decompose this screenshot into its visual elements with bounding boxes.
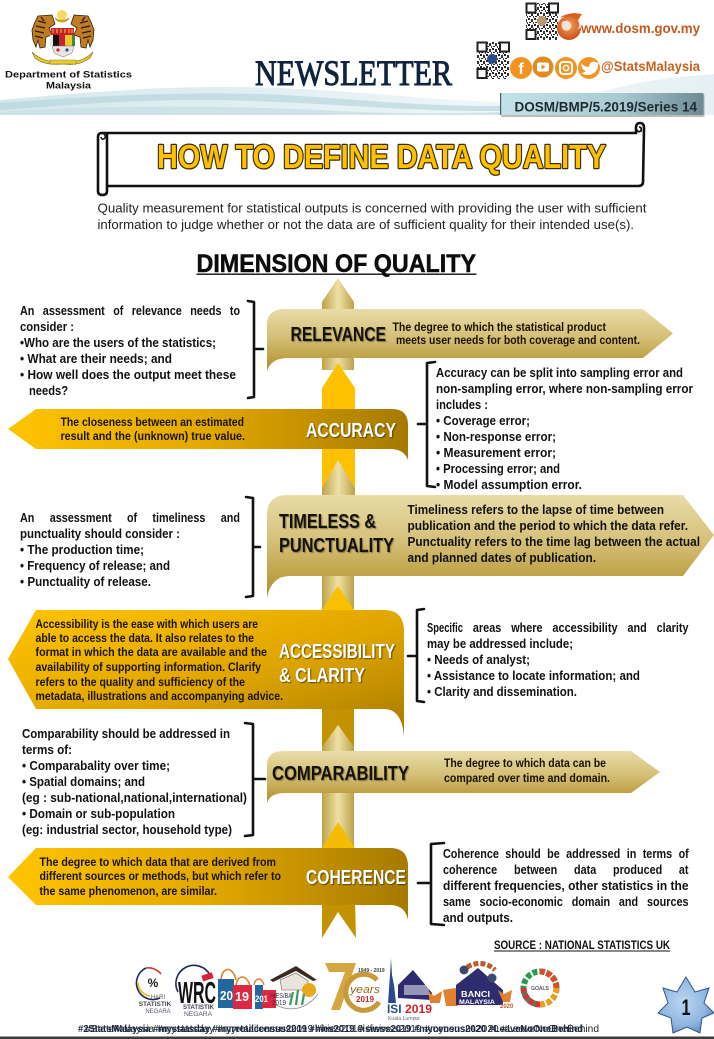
accuracy bracket bbox=[418, 362, 435, 487]
logo: WRC bbox=[176, 965, 216, 1018]
logo: Hari Statistik Negara: NEGARA bbox=[145, 1009, 171, 1015]
logo: retail census shopping bags bbox=[218, 970, 276, 1009]
social QR code bbox=[477, 42, 509, 79]
logo: WRC: STATISTIK bbox=[183, 1004, 214, 1011]
coherence definition: the same phenomenon, are similar. bbox=[40, 884, 217, 898]
timeliness definition: Timeliness refers to the lapse of time between bbox=[408, 502, 664, 517]
panel: comparability bbox=[22, 723, 660, 837]
timeliness considerations: • The production time; bbox=[20, 542, 144, 557]
logo: SDG wheel bbox=[524, 972, 556, 1004]
logo: household survey: HIES/BA bbox=[270, 993, 292, 1000]
logo: 70 years: years bbox=[349, 984, 381, 996]
coherence details: in bbox=[627, 846, 636, 861]
accessibility definition: metadata, illustrations and accompanying advice. bbox=[36, 689, 283, 703]
coherence details: and bbox=[619, 894, 638, 909]
accuracy details: • Processing error; and bbox=[436, 461, 560, 476]
comparability definition bbox=[444, 756, 610, 785]
accessibility details: • Assistance to locate information; and bbox=[427, 668, 640, 683]
accessibility bracket bbox=[408, 609, 424, 702]
intro paragraph bbox=[98, 200, 647, 232]
coherence details bbox=[443, 846, 689, 925]
coherence details: domain bbox=[572, 894, 610, 909]
relevance considerations: to bbox=[230, 303, 240, 318]
logo: ISI 2019 Kuala Lumpur: Kuala Lumpur bbox=[388, 1016, 420, 1022]
accuracy details: Accuracy can be split into sampling error and bbox=[436, 365, 683, 380]
comparability considerations: (eg : sub-national,national,international) bbox=[22, 790, 247, 805]
logo: ISI 2019 Kuala Lumpur bbox=[387, 958, 442, 1022]
accessibility details: • Clarity and dissemination. bbox=[427, 684, 577, 699]
accuracy details: • Measurement error; bbox=[436, 445, 556, 460]
accessibility definition: Accessibility is the ease with which users are bbox=[36, 617, 258, 631]
coherence definition: different sources or methods, but which refer to bbox=[40, 869, 281, 883]
panel: accuracy bbox=[8, 362, 693, 492]
logo: Hari Statistik Negara: HARI bbox=[151, 995, 165, 1001]
icon: social media buttons bbox=[510, 56, 600, 79]
relevance considerations: consider : bbox=[20, 319, 74, 334]
accessibility details: where bbox=[510, 620, 542, 635]
central arrow column bbox=[322, 278, 356, 938]
coherence details: produced bbox=[613, 862, 662, 877]
coherence details: Coherence bbox=[443, 846, 499, 861]
icon: social media buttons: f bbox=[518, 61, 524, 78]
accessibility details: accessibility bbox=[552, 620, 618, 635]
timeliness considerations: assessment bbox=[50, 510, 112, 525]
main title: HOW TO DEFINE DATA QUALITY bbox=[157, 138, 606, 175]
logo: ISI 2019 Kuala Lumpur: 2019 bbox=[405, 1002, 432, 1016]
accessibility details: and bbox=[628, 620, 647, 635]
icon: coat of arms bbox=[32, 10, 94, 64]
comparability considerations: • Spatial domains; and bbox=[22, 774, 145, 789]
relevance bracket bbox=[248, 301, 263, 398]
logo: Banci Malaysia 2020: BANCI bbox=[461, 989, 490, 999]
logo: Hari Statistik Negara: STATISTIK bbox=[139, 1001, 172, 1008]
relevance considerations: An bbox=[20, 303, 34, 318]
relevance considerations: relevance bbox=[132, 303, 182, 318]
relevance considerations: of bbox=[113, 303, 124, 318]
coherence bracket bbox=[418, 843, 444, 925]
series tab bbox=[500, 93, 704, 117]
comparability considerations: terms of: bbox=[22, 742, 72, 757]
relevance considerations: • How well does the output meet these bbox=[20, 367, 236, 382]
panel: coherence bbox=[8, 843, 689, 925]
coherence details: and outputs. bbox=[443, 910, 513, 925]
intro paragraph: information to judge whether or not the data are of sufficient quality for their intended use(s). bbox=[98, 217, 634, 232]
coherence details: same bbox=[443, 894, 471, 909]
timeliness banner bbox=[267, 495, 714, 598]
logo: ISI 2019 Kuala Lumpur: ISI bbox=[387, 1002, 402, 1016]
comparability label: COMPARABILITY bbox=[272, 763, 410, 785]
intro paragraph: Quality measurement for statistical outputs is concerned with providing the user with sufficient bbox=[98, 200, 647, 216]
website QR code bbox=[526, 3, 558, 40]
relevance banner bbox=[267, 309, 673, 371]
accuracy definition: The closeness between an estimated bbox=[60, 415, 244, 429]
timeliness considerations: An bbox=[20, 510, 34, 525]
coherence details: addressed bbox=[566, 846, 620, 861]
accessibility banner bbox=[8, 610, 404, 737]
coherence details: be bbox=[547, 846, 560, 861]
coherence details: terms bbox=[643, 846, 672, 861]
hashtags: #StatsMalaysia #mystatsday #myretailcensus2019 #hies2019 #isiwss2019 #mycensus2020 #LeaveNoOneBehind bbox=[85, 1024, 599, 1035]
relevance considerations: needs? bbox=[29, 383, 68, 398]
timeliness considerations: and bbox=[221, 510, 240, 525]
accessibility details: Specific bbox=[427, 620, 463, 635]
accessibility details: areas bbox=[473, 620, 501, 635]
timeliness label: PUNCTUALITY bbox=[279, 535, 395, 557]
series tab: DOSM/BMP/5.2019/Series 14 bbox=[514, 98, 697, 114]
comparability definition: The degree to which data can be bbox=[444, 756, 606, 770]
coherence details: at bbox=[679, 862, 689, 877]
relevance considerations bbox=[20, 303, 240, 398]
accessibility definition: able to access the data. It also relates to the bbox=[36, 631, 254, 645]
coherence details: socio-economic bbox=[480, 894, 563, 909]
icon: globe bbox=[557, 13, 583, 40]
accuracy definition bbox=[60, 415, 245, 443]
accuracy details: • Non-response error; bbox=[436, 429, 556, 444]
source note: SOURCE : NATIONAL STATISTICS UK bbox=[494, 938, 670, 952]
timeliness bracket bbox=[246, 497, 260, 597]
timeliness considerations bbox=[20, 510, 240, 589]
accessibility details: • Needs of analyst; bbox=[427, 652, 530, 667]
timeliness label: TIMELESS & bbox=[279, 511, 376, 533]
relevance considerations: needs bbox=[190, 303, 222, 318]
logo: retail census shopping bags: 201 bbox=[255, 994, 268, 1004]
timeliness considerations: timeliness bbox=[152, 510, 205, 525]
coherence details: sources bbox=[647, 894, 688, 909]
coherence banner bbox=[8, 848, 408, 920]
accuracy details: • Coverage error; bbox=[436, 413, 530, 428]
accessibility details: may be addressed include; bbox=[427, 636, 573, 651]
accessibility details bbox=[427, 620, 689, 699]
comparability considerations: (eg: industrial sector, household type) bbox=[22, 822, 232, 837]
accuracy details: • Model assumption error. bbox=[436, 477, 582, 492]
logo: 70 years: 1949 - 2019 bbox=[358, 968, 385, 974]
organisation name: Malaysia bbox=[46, 80, 92, 92]
coherence label: COHERENCE bbox=[306, 867, 406, 889]
comparability considerations bbox=[22, 726, 247, 837]
logo: WRC: NEGARA bbox=[184, 1012, 212, 1018]
panel: timeliness and punctuality bbox=[20, 495, 714, 598]
relevance definition: The degree to which the statistical product bbox=[392, 320, 606, 334]
timeliness definition bbox=[408, 502, 700, 565]
relevance definition: meets user needs for both coverage and content. bbox=[396, 333, 640, 347]
organisation name: Department of Statistics bbox=[5, 70, 132, 80]
page number star: 1 bbox=[682, 995, 690, 1020]
logo: retail census shopping bags: 19 bbox=[235, 989, 249, 1004]
logo: Banci Malaysia 2020: 2020 bbox=[500, 1004, 514, 1010]
timeliness considerations: • Punctuality of release. bbox=[20, 574, 151, 589]
comparability banner bbox=[267, 751, 660, 803]
timeliness definition: publication and the period to which the data refer. bbox=[408, 518, 688, 533]
accessibility definition bbox=[36, 617, 283, 703]
comparability considerations: • Domain or sub-population bbox=[22, 806, 175, 821]
comparability definition: compared over time and domain. bbox=[444, 771, 610, 785]
accuracy details bbox=[436, 365, 693, 492]
accessibility label bbox=[279, 641, 395, 687]
logo: WRC: WRC bbox=[178, 975, 216, 1010]
timeliness considerations: of bbox=[127, 510, 138, 525]
logo: household survey bbox=[270, 966, 318, 1009]
section heading: DIMENSION OF QUALITY bbox=[196, 250, 476, 278]
social media handle: @StatsMalaysia bbox=[601, 59, 700, 74]
relevance considerations: • What are their needs; and bbox=[20, 351, 172, 366]
accessibility label: & CLARITY bbox=[279, 665, 366, 687]
timeliness definition: and planned dates of publication. bbox=[408, 550, 596, 565]
accessibility definition: format in which the data are available and the bbox=[36, 645, 267, 659]
page number star bbox=[658, 977, 714, 1033]
accessibility details: clarity bbox=[657, 620, 689, 635]
comparability bracket bbox=[245, 723, 265, 836]
panel: accessibility and clarity bbox=[8, 609, 689, 737]
logo: household survey: 2019 bbox=[272, 1000, 286, 1007]
title scroll bbox=[98, 123, 644, 195]
website address: www.dosm.gov.my bbox=[580, 20, 700, 36]
organisation name bbox=[5, 70, 132, 92]
accessibility definition: availability of supporting information. Clarify bbox=[36, 660, 261, 674]
hashtags: #2StatsMalaysia #mystatsday #myretailcensus2019 #hies2019 #isiwss2019 #mycensus2020 #LeaveNoOneBehind bbox=[78, 1023, 583, 1035]
timeliness considerations: • Frequency of release; and bbox=[20, 558, 170, 573]
newsletter heading: NEWSLETTER bbox=[255, 53, 452, 93]
bottom border bbox=[0, 1036, 714, 1039]
accessibility definition: refers to the quality and sufficiency of the bbox=[36, 675, 245, 689]
coherence details: data bbox=[574, 862, 597, 877]
coherence definition: The degree to which data that are derived from bbox=[40, 855, 276, 869]
timeliness label bbox=[279, 511, 395, 557]
coherence details: coherence bbox=[443, 862, 497, 877]
comparability considerations: Comparability should be addressed in bbox=[22, 726, 230, 741]
logo: Banci Malaysia 2020 bbox=[443, 963, 514, 1010]
logo: retail census shopping bags: 20 bbox=[220, 988, 233, 1003]
header wave banner bbox=[0, 74, 714, 115]
coherence details: different frequencies, other statistics in the bbox=[443, 878, 688, 893]
accuracy label: ACCURACY bbox=[306, 420, 397, 442]
accuracy details: includes : bbox=[436, 397, 488, 412]
logo: Hari Statistik Negara: % bbox=[148, 976, 159, 990]
accuracy details: non-sampling error, where non-sampling error bbox=[436, 381, 693, 396]
relevance considerations: •Who are the users of the statistics; bbox=[20, 335, 216, 350]
logo: 70 years bbox=[325, 963, 385, 1010]
comparability considerations: • Comparabality over time; bbox=[22, 758, 170, 773]
relevance label: RELEVANCE bbox=[290, 324, 386, 346]
timeliness considerations: punctuality should consider : bbox=[20, 526, 180, 541]
accuracy banner bbox=[8, 409, 408, 460]
accuracy definition: result and the (unknown) true value. bbox=[60, 429, 245, 443]
panel: relevance bbox=[20, 301, 673, 398]
coherence details: of bbox=[679, 846, 689, 861]
logo: Hari Statistik Negara bbox=[136, 968, 172, 1015]
relevance considerations: assessment bbox=[43, 303, 105, 318]
logo: SDG wheel: GOALS bbox=[531, 986, 550, 992]
logo: Banci Malaysia 2020: MALAYSIA bbox=[459, 1000, 496, 1006]
relevance definition bbox=[392, 320, 640, 347]
accessibility label: ACCESSIBILITY bbox=[279, 641, 395, 663]
logo: 70 years: 2019 bbox=[356, 995, 375, 1004]
coherence details: between bbox=[514, 862, 557, 877]
coherence definition bbox=[40, 855, 281, 898]
coherence details: should bbox=[505, 846, 541, 861]
